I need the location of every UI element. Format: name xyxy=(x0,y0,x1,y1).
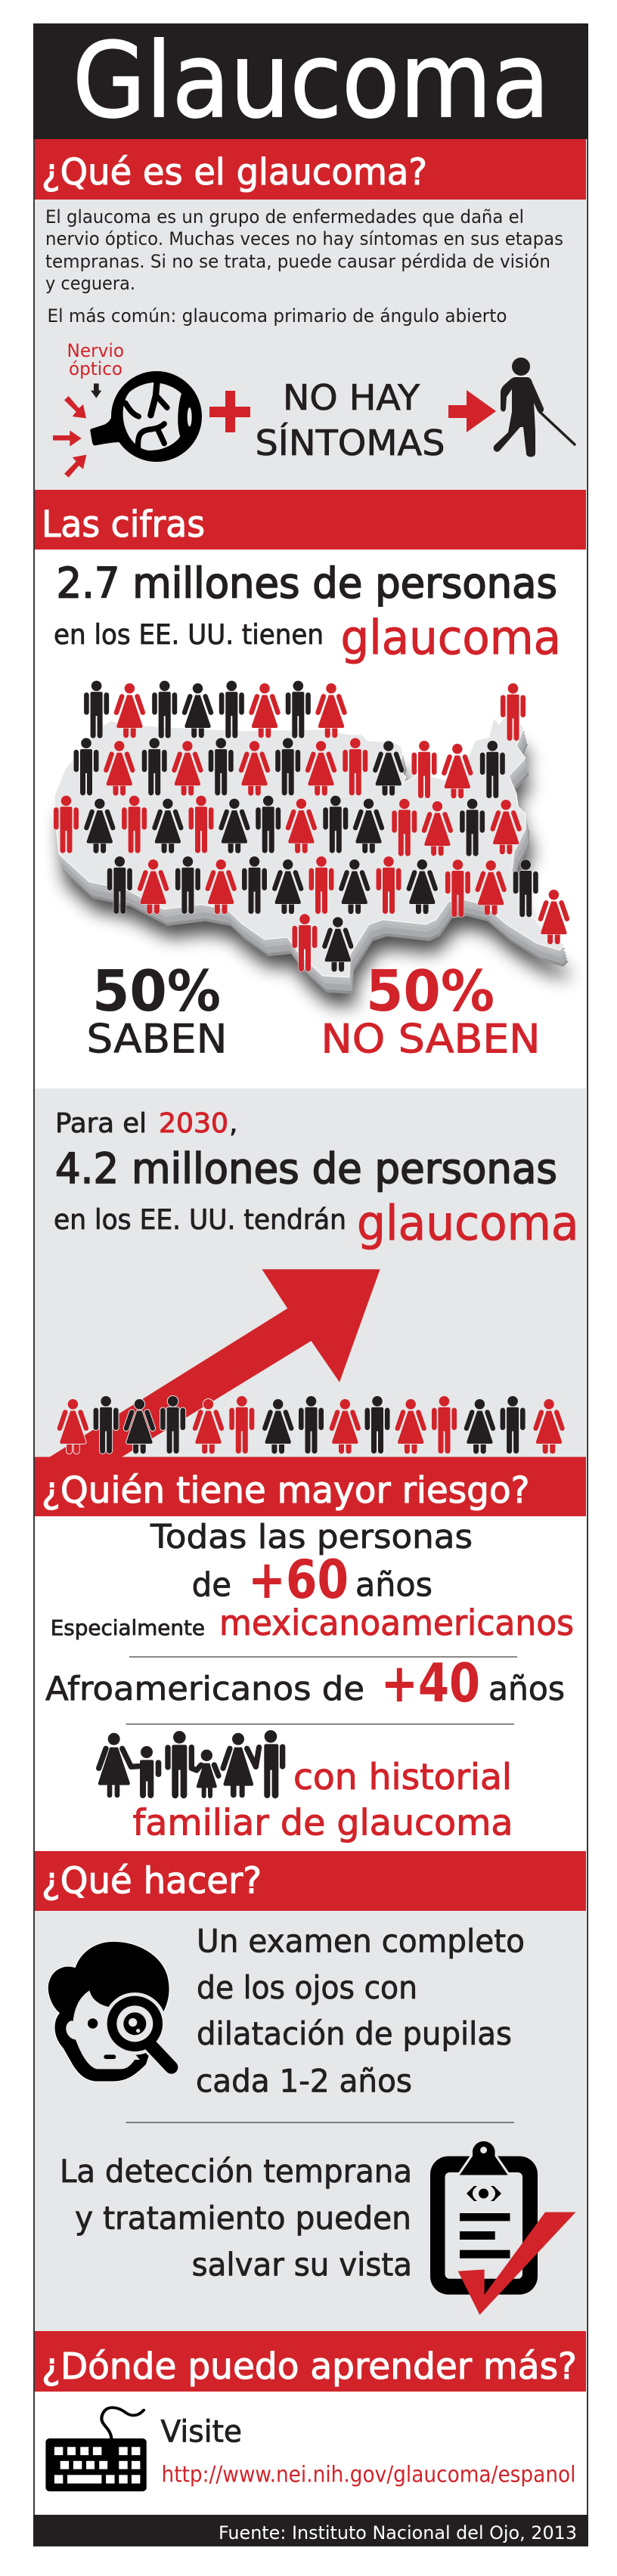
panel: what to do xyxy=(35,1911,586,2331)
text: afroamericanos de +40 años: Afroamericanos de xyxy=(45,1670,364,1708)
icon: plus xyxy=(209,391,250,432)
stat: 50% no saben: NO SABEN xyxy=(321,1016,540,1063)
heading: Quién tiene mayor riesgo xyxy=(35,1457,586,1516)
pictogram: row of people xyxy=(57,1396,566,1454)
text: con historial familiar de glaucoma: con historial xyxy=(293,1757,512,1798)
text: no hay síntomas xyxy=(256,377,445,463)
arrow: leads to blindness xyxy=(448,390,496,432)
text: url: http://www.nei.nih.gov/glaucoma/espanol xyxy=(162,2462,576,2488)
icon: family xyxy=(98,1730,285,1798)
text: con historial familiar de glaucoma: familiar de glaucoma xyxy=(133,1803,513,1844)
stat: 50% no saben xyxy=(321,958,540,1063)
heading: Qué es el glaucoma: ¿Qué es el glaucoma? xyxy=(42,151,427,194)
text: de +60 años: de xyxy=(192,1566,231,1605)
panel: learn more xyxy=(45,2407,576,2491)
text: para el 2030: , xyxy=(229,1108,237,1139)
definition text: nervio óptico. Muchas veces no hay síntomas en sus etapas xyxy=(45,228,563,249)
panel: figures today xyxy=(54,559,571,1063)
map: United States 3D xyxy=(54,713,571,1006)
stat: 2.7 millones: 2.7 millones de personas xyxy=(56,559,557,608)
icon: person with cane xyxy=(494,358,575,457)
text: visite: Visite xyxy=(160,2414,242,2449)
text: glaucoma: glaucoma xyxy=(357,1196,579,1251)
footer: source xyxy=(33,2515,588,2546)
text: afroamericanos de +40 años: años xyxy=(488,1670,565,1708)
stat: 50% saben: 50% xyxy=(92,958,221,1024)
heading: Las cifras xyxy=(35,490,586,550)
text: especialmente: Especialmente xyxy=(51,1615,205,1640)
text: eye exam xyxy=(196,1923,525,2100)
text: early detection: y tratamiento pueden xyxy=(75,2200,411,2237)
definition text: tempranas. Si no se trata, puede causar pérdida de visión xyxy=(45,251,550,272)
definition text: y ceguera. xyxy=(45,273,135,294)
stat: 50% saben: SABEN xyxy=(86,1016,227,1063)
heading: Quién tiene mayor riesgo: ¿Quién tiene mayor riesgo? xyxy=(42,1469,529,1512)
icon: eye with pressure arrows xyxy=(53,371,202,478)
heading: Qué es el glaucoma xyxy=(35,139,586,200)
footer: source: Fuente: Instituto Nacional del Ojo, 2013 xyxy=(219,2522,577,2543)
text: early detection: La detección temprana xyxy=(60,2153,412,2190)
text: no hay síntomas: SÍNTOMAS xyxy=(256,423,445,463)
text: con historial familiar de glaucoma xyxy=(133,1757,513,1844)
text: eye exam: cada 1-2 años xyxy=(196,2063,412,2100)
title: Glaucoma xyxy=(73,21,550,141)
panel: title header xyxy=(33,21,588,141)
text: mexicanoamericanos: mexicanoamericanos xyxy=(219,1602,574,1643)
heading: Las cifras: Las cifras xyxy=(42,503,205,546)
label: nervio óptico: óptico xyxy=(69,358,122,379)
text: glaucoma: glaucoma xyxy=(340,610,561,665)
text: de +60 años: años xyxy=(355,1566,433,1605)
label: nervio óptico: Nervio xyxy=(67,340,124,361)
icon: clipboard with check xyxy=(430,2140,576,2314)
text: early detection: salvar su vista xyxy=(192,2246,412,2283)
text: no hay síntomas: NO HAY xyxy=(283,377,420,418)
label: nervio óptico xyxy=(67,340,124,379)
text: afroamericanos de +40 años: +40 xyxy=(381,1652,480,1714)
text: para el 2030 xyxy=(55,1108,237,1139)
text: de +60 años: +60 xyxy=(248,1549,349,1611)
text: eye exam: dilatación de pupilas xyxy=(197,2015,512,2052)
stat: 4.2 millones: 4.2 millones de personas xyxy=(55,1144,557,1193)
panel: projection 2030 xyxy=(35,1088,586,1457)
stat: 50% saben xyxy=(86,958,227,1063)
text: en los EE. UU. tendrán: en los EE. UU. tendrán xyxy=(54,1203,346,1236)
text: para el 2030: Para el xyxy=(55,1108,147,1139)
heading: Dónde puedo aprender más xyxy=(35,2331,586,2392)
definition text xyxy=(45,206,563,294)
panel: what is glaucoma xyxy=(35,200,586,490)
heading: Qué hacer xyxy=(35,1851,586,1911)
text: eye exam: de los ojos con xyxy=(197,1969,417,2006)
text: para el 2030: 2030 xyxy=(159,1108,228,1139)
icon: face with magnifier xyxy=(48,1941,172,2082)
text: en los EE. UU. tienen: en los EE. UU. tienen xyxy=(54,618,324,651)
panel: risk groups xyxy=(45,1518,574,1844)
text: afroamericanos de +40 años xyxy=(45,1652,565,1714)
icon: keyboard xyxy=(45,2407,147,2491)
definition text: El glaucoma es un grupo de enfermedades que daña el xyxy=(45,206,524,228)
text: eye exam: Un examen completo xyxy=(197,1923,525,1960)
stat: 50% no saben: 50% xyxy=(366,958,495,1024)
heading: Dónde puedo aprender más: ¿Dónde puedo aprender más? xyxy=(42,2345,577,2388)
text: de +60 años xyxy=(192,1549,433,1611)
pictogram: people on map xyxy=(54,681,570,972)
most common type text: El más común: glaucoma primario de ángulo abierto xyxy=(47,305,507,327)
arrow: rising trend xyxy=(49,1269,380,1457)
text: todas las personas: Todas las personas xyxy=(150,1518,473,1556)
heading: Qué hacer: ¿Qué hacer? xyxy=(42,1859,262,1902)
text: early detection xyxy=(60,2153,412,2283)
